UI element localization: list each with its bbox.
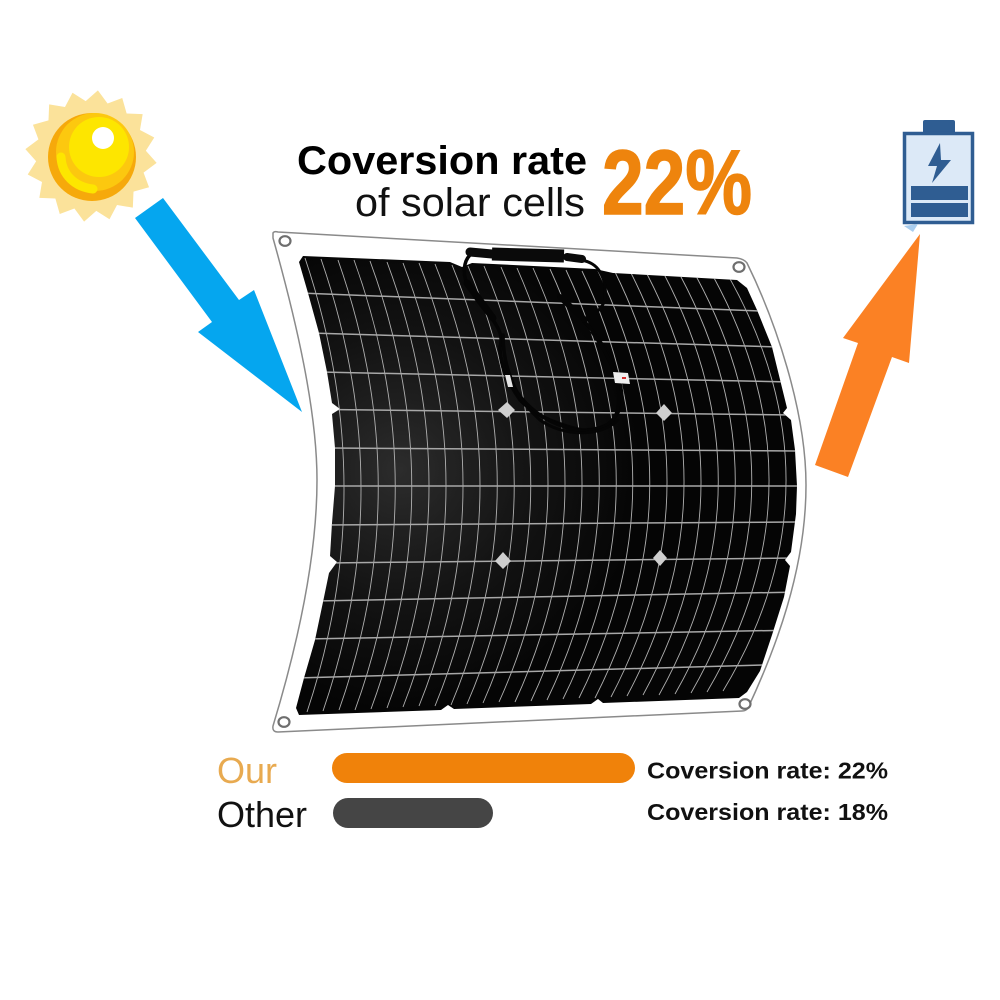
row: other product: Other — [217, 794, 307, 835]
cable and junction box — [464, 252, 622, 433]
panel: white backing sheet — [273, 232, 806, 732]
icon: sun — [18, 83, 164, 229]
heading: conversion rate — [297, 132, 752, 234]
row: other product: Coversion rate: 18% — [647, 799, 888, 825]
row: our product — [217, 750, 888, 791]
grommets — [278, 236, 750, 727]
icon: battery — [904, 120, 972, 232]
heading: conversion rate: 22% — [602, 132, 752, 234]
panel: dark solar cells — [296, 256, 797, 715]
heading: conversion rate: of solar cells — [355, 181, 585, 225]
comparison legend — [217, 750, 888, 835]
heading: conversion rate: Coversion rate — [297, 139, 587, 183]
row: our product: Coversion rate: 22% — [647, 758, 888, 784]
diamond connectors — [495, 402, 672, 569]
row: our product: Our — [217, 750, 277, 791]
cable labels — [505, 372, 630, 387]
arrow: blue incoming sunlight — [135, 198, 302, 412]
row: other product — [217, 794, 888, 835]
solar panel — [273, 232, 810, 732]
arrow: orange outgoing power — [815, 234, 920, 477]
